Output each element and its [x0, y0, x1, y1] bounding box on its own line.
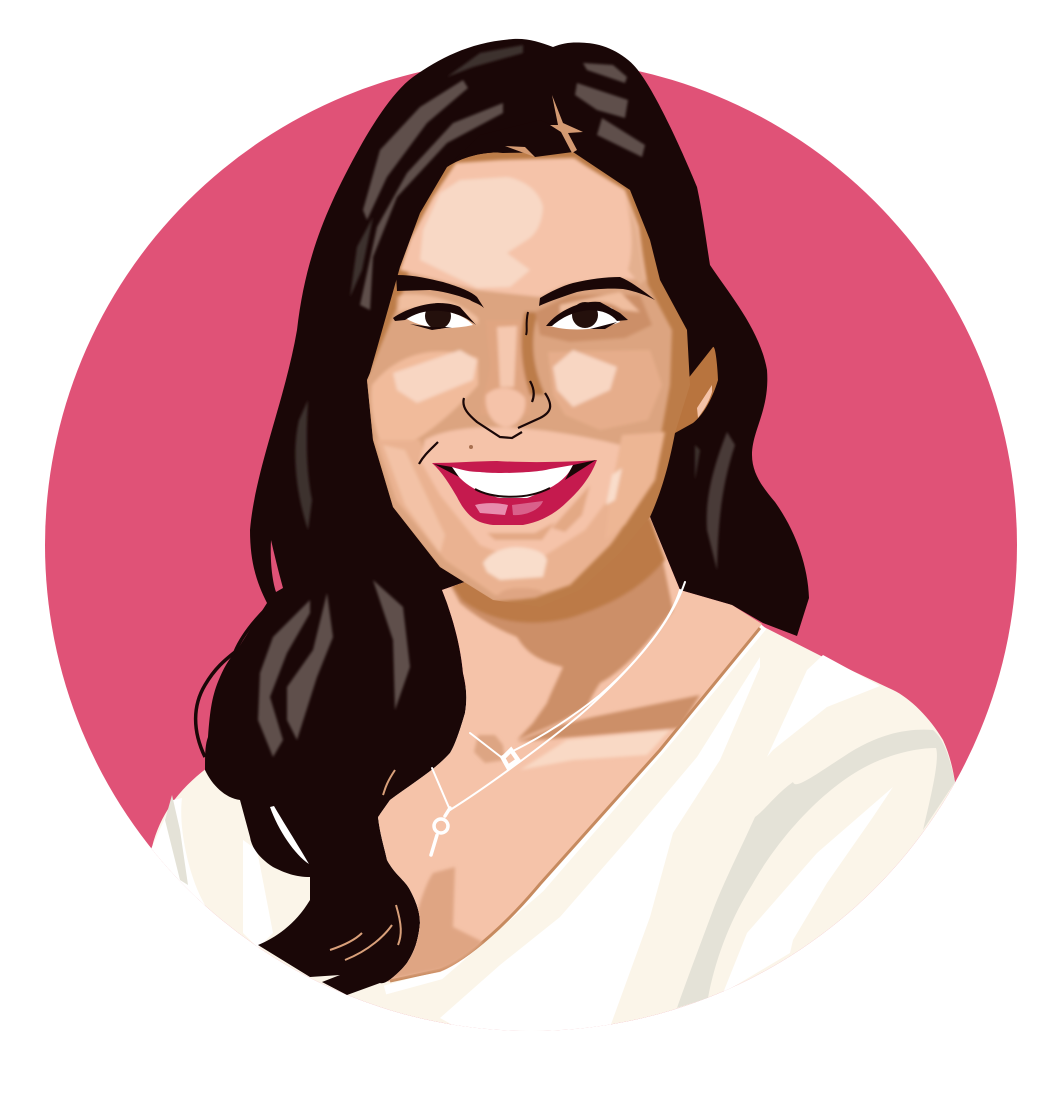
right temple tone — [628, 206, 646, 284]
lips — [432, 460, 597, 525]
shirt white fold shoulder — [767, 655, 880, 757]
mouth corner shadows — [434, 460, 596, 480]
nose highlight — [497, 326, 517, 387]
shirt grey sleeve fold — [677, 730, 955, 1008]
lip highlight — [475, 503, 508, 515]
heart pendant — [503, 750, 518, 767]
under-lip shade — [487, 522, 555, 540]
nostril mole — [469, 445, 473, 449]
small collar shadow — [474, 735, 505, 763]
hair highlights — [258, 45, 735, 757]
left iris — [425, 303, 451, 329]
nose bridge — [480, 320, 530, 415]
white area below disc left — [151, 798, 205, 906]
necklace chain upper — [470, 582, 685, 757]
shirt white fold centre — [440, 657, 760, 1040]
lip highlight right — [512, 501, 543, 515]
shirt grey fold left — [165, 795, 188, 885]
face tones — [364, 158, 672, 602]
teeth — [452, 465, 573, 498]
chest shadow — [387, 867, 483, 980]
mouth area — [420, 427, 620, 565]
shirt — [151, 624, 955, 1031]
nose tip — [486, 388, 525, 427]
left cheek highlight — [393, 350, 477, 403]
key pendant — [431, 808, 450, 855]
right iris — [572, 302, 598, 328]
right eyelid light — [560, 292, 640, 315]
right lower lash — [590, 322, 617, 329]
right cheek — [548, 350, 662, 430]
left eye white — [405, 311, 473, 328]
right eye socket — [535, 295, 652, 342]
forehead highlight — [420, 177, 543, 288]
stripe highlight right — [606, 468, 622, 505]
white strip along neckline — [385, 626, 763, 990]
skin strands in hair — [330, 770, 401, 960]
teeth lower line — [475, 488, 550, 497]
left eye socket — [395, 296, 487, 345]
left lash line — [393, 303, 476, 325]
face mid tone — [364, 158, 672, 602]
chin shadow — [502, 588, 540, 594]
left lower face — [377, 440, 619, 595]
left eyelid light — [398, 294, 478, 325]
necklace chain lower — [432, 590, 680, 810]
shirt white fold sleeve — [723, 787, 893, 993]
collarbone highlight — [520, 730, 670, 770]
hairline strand — [447, 120, 577, 167]
right eyebrow — [539, 277, 655, 306]
cheek light stripe right — [616, 430, 666, 526]
chest skin — [378, 517, 762, 982]
forehead — [400, 158, 646, 297]
hair parting — [550, 95, 583, 153]
necklace — [431, 582, 685, 855]
nose side line right — [526, 312, 528, 335]
mouth — [432, 460, 597, 525]
ear — [670, 340, 718, 433]
neck shadow — [450, 562, 674, 740]
chin highlight — [483, 547, 547, 580]
collarbone shadow — [517, 695, 700, 742]
ear highlight — [697, 385, 712, 418]
left lower lash — [410, 324, 452, 330]
face — [364, 152, 690, 607]
face base shadow — [367, 152, 690, 607]
left cheek — [371, 351, 478, 442]
neck dark shadow band — [445, 517, 665, 623]
nose lines — [419, 381, 550, 464]
right cheek highlight — [553, 350, 617, 407]
hairline wisps — [505, 146, 535, 157]
right eye white — [550, 307, 620, 329]
nose right side shadow — [521, 312, 545, 395]
neckline shadow edge — [390, 628, 760, 981]
hair gap on shirt — [270, 806, 309, 864]
right eye — [526, 302, 628, 335]
right lash line — [546, 302, 628, 326]
left jaw light stripe — [383, 445, 445, 553]
chest and neck tones — [387, 517, 700, 980]
left eyebrow — [396, 275, 484, 308]
left eye — [393, 303, 476, 330]
shirt white fold left — [243, 840, 273, 948]
hair — [205, 39, 809, 995]
hair gap pink — [271, 540, 283, 592]
hair outline loops — [196, 570, 732, 817]
shade right of chin — [552, 485, 590, 532]
